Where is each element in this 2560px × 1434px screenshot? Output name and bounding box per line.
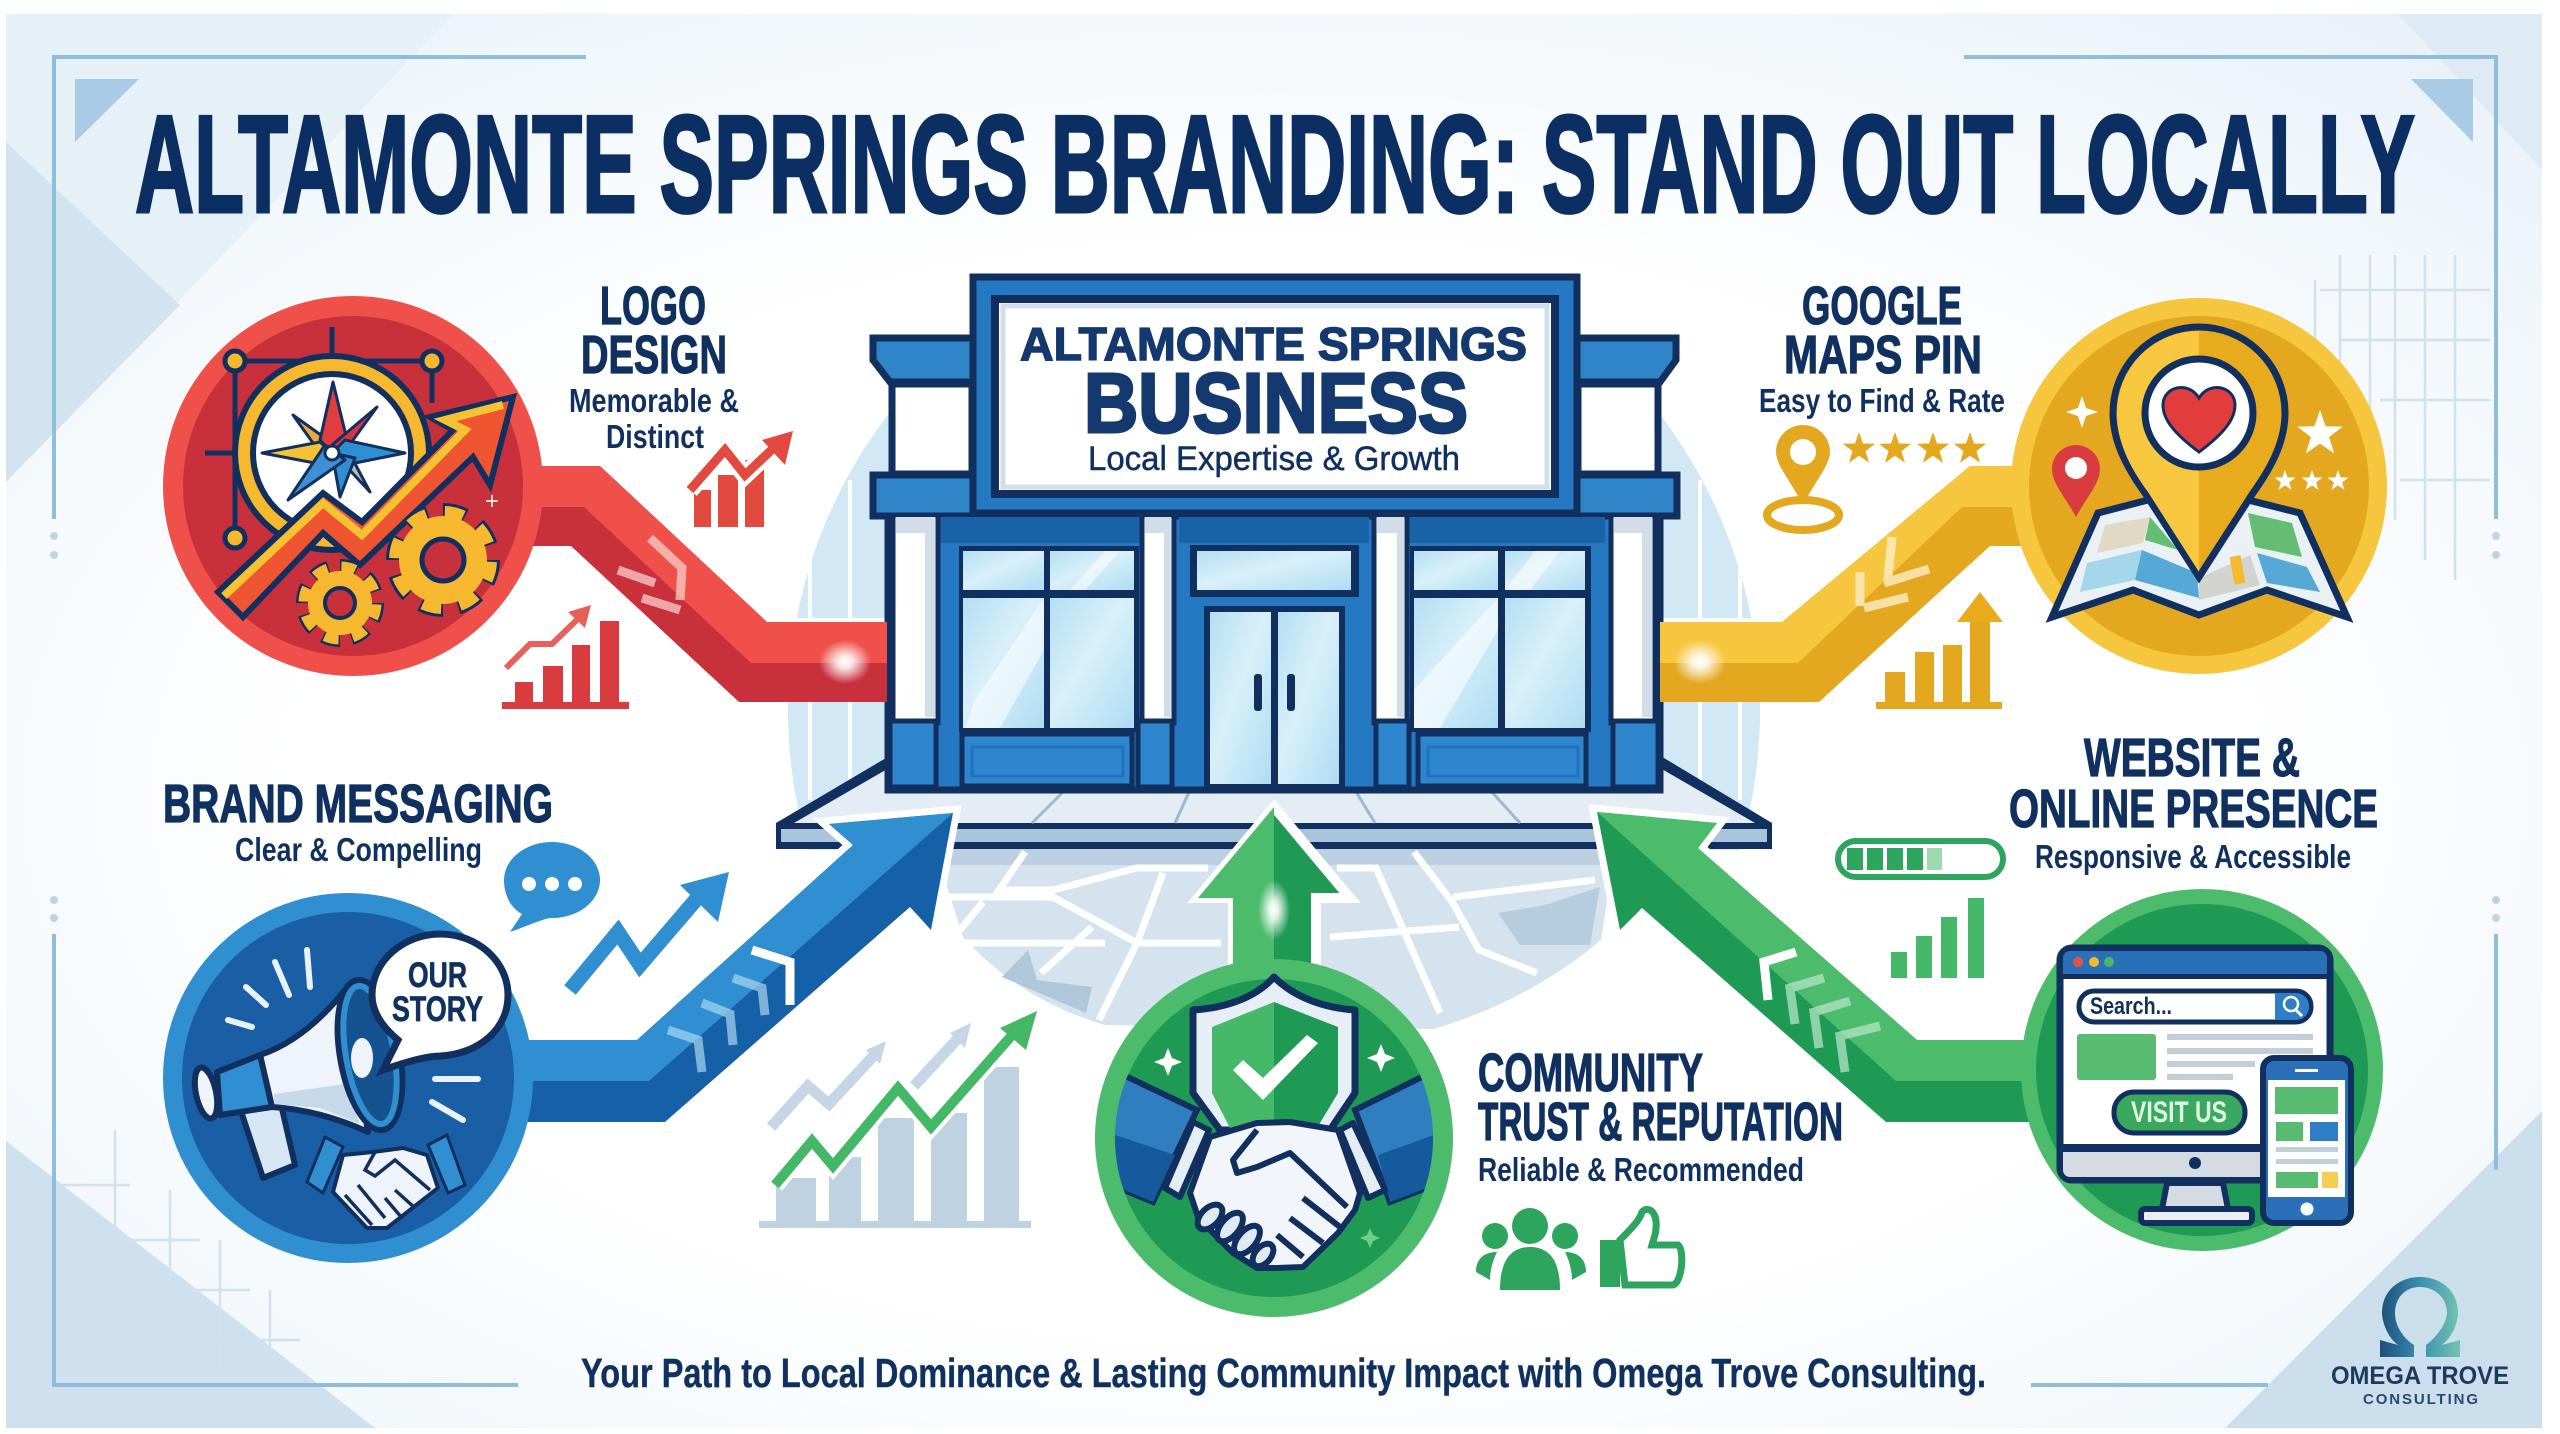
icon: logo design circle [163, 296, 543, 676]
icon: community trust circle [1095, 959, 1453, 1317]
icon: green bars [1891, 898, 1984, 978]
heading: website: Responsive & Accessible [2035, 838, 2351, 875]
search box [2079, 991, 2311, 1022]
storefront platform [776, 758, 1772, 849]
arrow: green right to storefront [1597, 812, 2030, 1122]
heading: logo design: Distinct [606, 418, 704, 455]
stars and sparkles [2066, 396, 2348, 490]
logo: omega trove consulting: CONSULTING [2363, 1391, 2478, 1408]
visit us button [2114, 1092, 2245, 1133]
visit us button: VISIT US [2131, 1096, 2227, 1129]
icon: people [1476, 1208, 1586, 1290]
small handshake [307, 1135, 465, 1228]
shield [1193, 977, 1355, 1130]
heading: google maps pin: Easy to Find & Rate [1759, 382, 2005, 419]
heading: community trust: COMMUNITY [1478, 1043, 1703, 1103]
our story bubble [372, 934, 508, 1070]
phone [2263, 1058, 2351, 1223]
city map: lower streets [935, 849, 1615, 1029]
chart: central growth chart [759, 1011, 1037, 1228]
monitor [2060, 948, 2330, 1223]
window reflections [965, 551, 1560, 728]
arrow: blue to storefront [525, 813, 953, 1122]
big gear [396, 513, 490, 607]
icon: brand messaging circle [163, 893, 533, 1263]
heading: logo design: Memorable & [569, 382, 739, 419]
handshake [1190, 1122, 1360, 1270]
search box: Search... [2090, 993, 2172, 1020]
heading: website [2009, 728, 2378, 875]
sign board [995, 299, 1555, 494]
heading: logo design: LOGO [600, 276, 706, 336]
icon: thumbs up [1600, 1209, 1682, 1287]
icon: pin with stars [1767, 425, 1986, 530]
lower storefront wall [888, 516, 1660, 790]
sleeves [1115, 1074, 1433, 1206]
sign frame [973, 277, 1577, 513]
growth arrow [218, 397, 513, 617]
arrow: yellow to storefront [1660, 466, 2030, 702]
heading: google maps pin: MAPS PIN [1784, 325, 1982, 385]
city map: upper circle [780, 390, 1780, 850]
icon: yellow chart [1876, 592, 2003, 709]
icon: website circle [2021, 889, 2383, 1251]
sign text: Altamonte Springs: ALTAMONTE SPRINGS [1020, 318, 1527, 370]
sparkles [1154, 1044, 1395, 1248]
heading: website: WEBSITE & [2084, 728, 2300, 788]
our story bubble: STORY [392, 990, 483, 1029]
footer tagline: Your Path to Local Dominance & Lasting Community Impact with Omega Trove Consulting. [581, 1350, 1986, 1396]
heading: community trust: TRUST & REPUTATION [1478, 1092, 1843, 1152]
right window [1410, 546, 1591, 732]
heading: community trust: Reliable & Recommended [1478, 1151, 1804, 1188]
heading: google maps pin [1759, 276, 2005, 419]
sound lines [228, 950, 478, 1120]
cuffs [1165, 1122, 1385, 1198]
heading: logo design [569, 276, 739, 455]
icon: red chart upper [690, 431, 793, 527]
heading: community trust [1478, 1043, 1843, 1188]
pillars [893, 515, 1655, 723]
heading: brand messaging: BRAND MESSAGING [163, 774, 553, 834]
big map pin [2113, 327, 2285, 577]
left window [959, 546, 1139, 732]
heading: website: ONLINE PRESENCE [2009, 779, 2378, 839]
storefront building [776, 277, 1772, 849]
sign text: Business: BUSINESS [1084, 356, 1468, 450]
map [2052, 500, 2347, 617]
our story bubble: OUR [408, 956, 467, 995]
icon: red chart lower [502, 605, 629, 709]
arrow: red to storefront [530, 466, 887, 702]
arrow: green center up [1198, 807, 1350, 975]
icon: google maps circle [2011, 298, 2387, 674]
icon: blue zigzag arrow [570, 872, 729, 990]
icon: progress bar [1838, 841, 2003, 877]
side cornices [873, 338, 1677, 516]
heading: brand messaging [163, 774, 553, 868]
small red pin [2052, 445, 2100, 517]
sign text: tagline: Local Expertise & Growth [1088, 440, 1460, 478]
base panels [890, 721, 1658, 787]
compass [235, 356, 429, 550]
door section [1190, 545, 1359, 790]
logo: omega trove consulting: OMEGA TROVE [2331, 1362, 2509, 1390]
heading: google maps pin: GOOGLE [1802, 276, 1962, 336]
megaphone [191, 975, 413, 1178]
heading: logo design: DESIGN [581, 325, 727, 385]
small gear [305, 568, 375, 638]
icon: chat bubble [504, 842, 600, 932]
icon: omega [2380, 1277, 2460, 1357]
logo: omega trove consulting [2331, 1277, 2509, 1408]
heading: brand messaging: Clear & Compelling [235, 831, 482, 868]
